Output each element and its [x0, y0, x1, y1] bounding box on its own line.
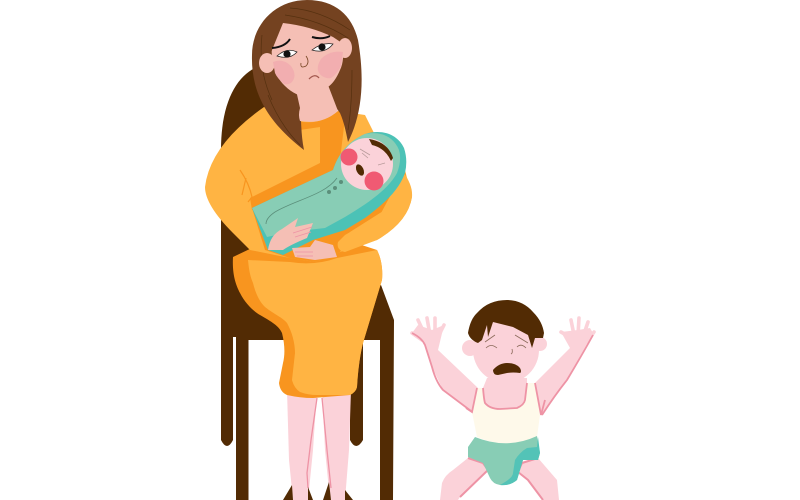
eyes and brows — [272, 36, 333, 58]
toddler head — [462, 300, 547, 383]
baby face — [340, 138, 393, 190]
mother head — [252, 0, 362, 150]
mother legs — [283, 390, 353, 500]
toddler diaper — [468, 436, 540, 485]
toddler vest — [472, 383, 540, 444]
mother hands — [268, 218, 337, 260]
baby in swaddle — [252, 132, 406, 255]
mother sweater — [205, 107, 412, 262]
chair — [221, 68, 394, 500]
toddler legs — [440, 458, 559, 500]
mother dress — [233, 225, 382, 398]
toddler — [412, 300, 594, 500]
toddler arms — [412, 318, 594, 415]
